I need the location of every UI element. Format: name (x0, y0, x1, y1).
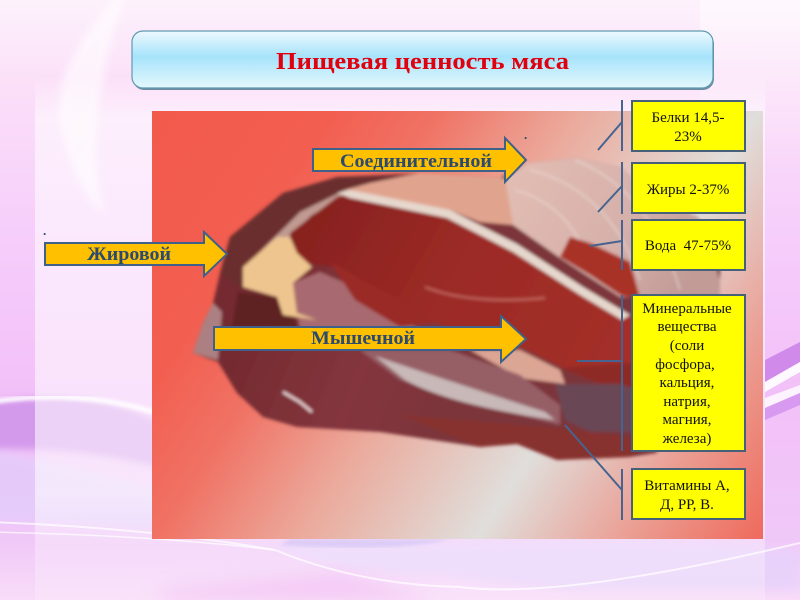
label box: Минеральные вещества: (соли (670, 338, 704, 354)
connector: Жиры (598, 162, 622, 214)
small muscle patch (560, 237, 640, 298)
arrow: Мышечной: Мышечной (311, 328, 415, 349)
shine on lower muscle (283, 392, 312, 412)
label box: Вода: Вода 47-75% (645, 238, 731, 254)
label box: Минеральные вещества: железа) (662, 431, 711, 447)
label box: Минеральные вещества: натрия, (663, 394, 711, 410)
white sinew strip along muscle (337, 190, 630, 320)
sinew band, lavender (360, 350, 560, 425)
label box: Белки (632, 101, 745, 151)
lower muscle layer (330, 262, 435, 327)
label box: Минеральные вещества: магния, (663, 412, 711, 428)
label box: Белки: 23% (674, 129, 702, 145)
label box: Вода (632, 220, 745, 270)
pale lower-left flap (193, 303, 222, 360)
label box: Жиры (632, 163, 745, 213)
label box: Белки: Белки 14,5- (651, 110, 725, 126)
lower red mass (560, 362, 660, 440)
label box: Витамины: Д, РР, В. (660, 497, 714, 513)
arrow: Жировой: Жировой (87, 244, 171, 265)
pale fascia band (345, 173, 513, 225)
photo backdrop gradient (152, 111, 763, 539)
connector: Витамины (565, 425, 622, 520)
meat outer silhouette (193, 158, 720, 460)
arrow: Соединительной (313, 138, 526, 182)
arrow: Жировой (45, 232, 227, 276)
label box: Витамины: Витамины А, (644, 478, 730, 494)
white sinew highlight (375, 356, 555, 420)
fat deposit (243, 237, 317, 320)
label box: Витамины (632, 469, 745, 519)
greyish ridge highlight (262, 190, 350, 250)
title banner (132, 31, 714, 90)
arrow: Соединительной: Соединительной (340, 151, 492, 172)
tan strip under arrow (470, 350, 565, 384)
fleshy lower seam (400, 415, 655, 460)
label box: Минеральные вещества: вещества (658, 319, 717, 335)
label box: Минеральные вещества: кальция, (660, 375, 714, 391)
dark recess under fat (232, 292, 298, 327)
lavender muscle under fat (293, 272, 420, 330)
connector: Белки (598, 100, 622, 151)
bracket lines and connectors (565, 100, 622, 520)
dark upper ridge (220, 176, 400, 290)
label box: Минеральные вещества: Минеральные (642, 301, 732, 317)
meat cut (193, 158, 720, 460)
meat photo panel (152, 111, 763, 539)
stray dot near Соединительной: . (524, 127, 527, 142)
connector: Вода (590, 220, 622, 270)
connective fan (505, 158, 720, 297)
label box: Минеральные вещества (632, 295, 745, 451)
stray dot near Жировой: . (43, 223, 46, 238)
label box: Минеральные вещества: фосфора, (655, 357, 715, 373)
bluish muscle end (555, 384, 650, 432)
main red muscle (290, 193, 640, 370)
title text: Пищевая ценность мяса (276, 49, 569, 75)
internal fascia streak (425, 287, 545, 300)
connector: Минеральные вещества (577, 295, 622, 451)
label box: Жиры: Жиры 2-37% (647, 182, 729, 198)
arrow: Мышечной (214, 316, 526, 362)
